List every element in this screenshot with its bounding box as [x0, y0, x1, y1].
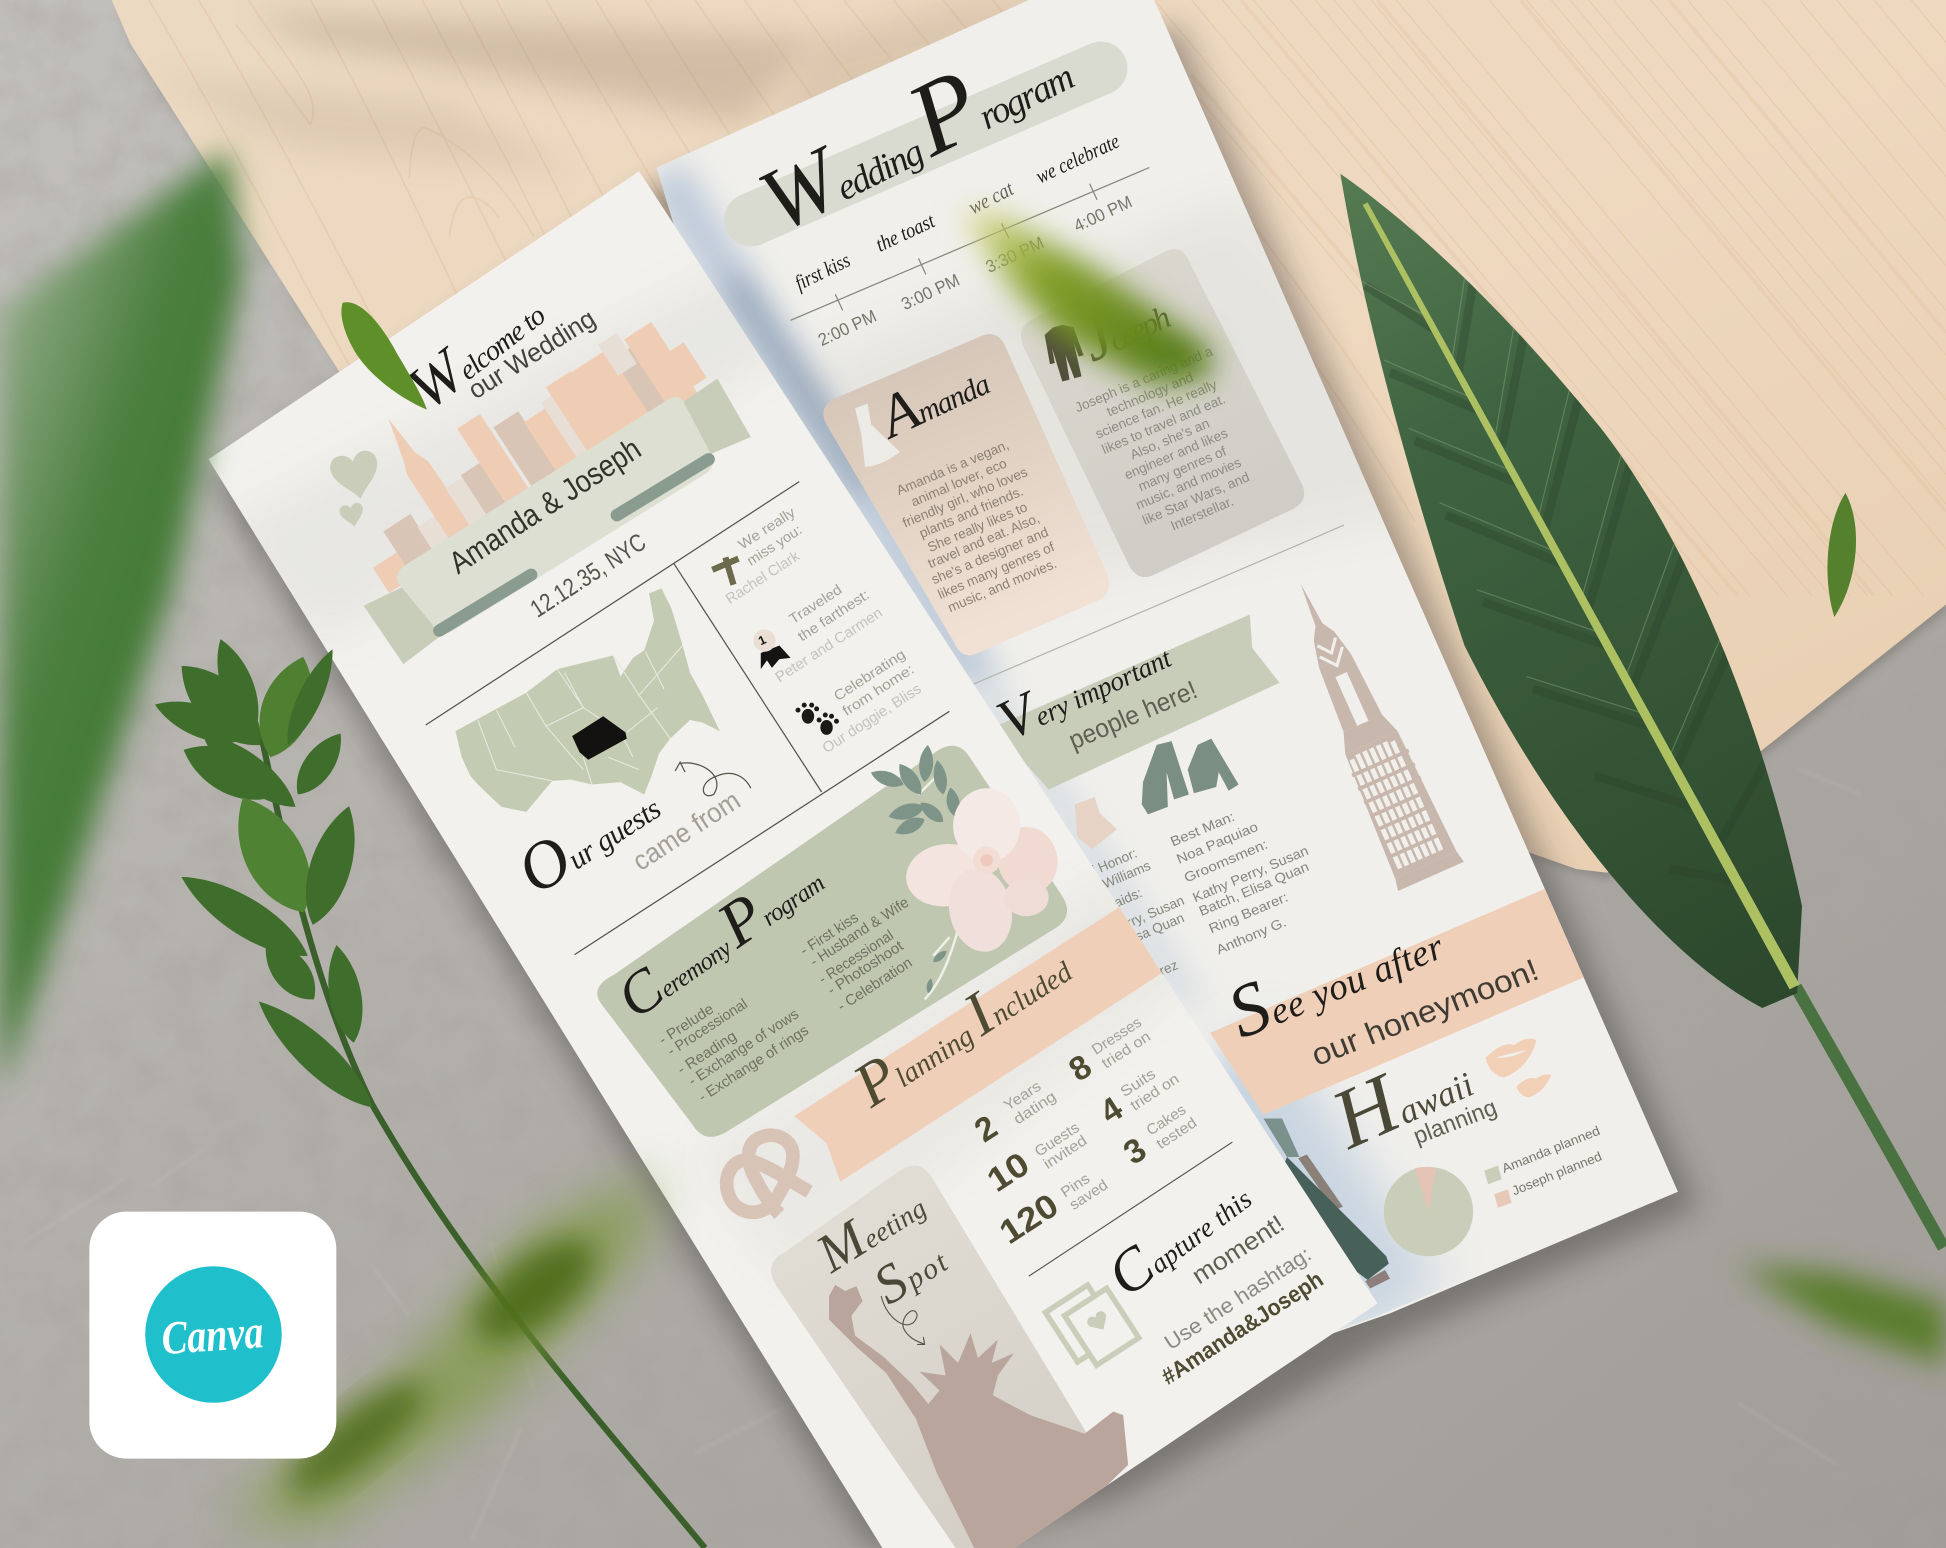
- heading: see you after our honeymoon: our honeymoon!: [1307, 952, 1543, 1073]
- timeline: [791, 129, 1149, 350]
- Amanda bio: friendly girl, who loves: [900, 464, 1030, 531]
- timeline labels: 3:00 PM: [898, 270, 963, 314]
- Joseph bio: [1073, 343, 1252, 533]
- USA map: [455, 588, 720, 812]
- text: Celebrating from home: from home:: [840, 662, 917, 720]
- panel: right paper: [657, 0, 1678, 1366]
- Joseph bio: science fan. He really: [1093, 377, 1219, 442]
- icon: first-place ribbon: [753, 629, 791, 669]
- legend: [1484, 1123, 1604, 1208]
- heading: Planning Included: Planning Included: [841, 931, 1082, 1121]
- Joseph bio: many genres of: [1136, 443, 1229, 494]
- stats: planning numbers: Cakes: [1144, 1102, 1189, 1139]
- heading: Meeting Spot: [805, 1172, 957, 1316]
- stats: planning numbers: saved: [1067, 1177, 1111, 1214]
- heading: Our guests came from: came from: [627, 784, 746, 876]
- big tropical leaf: [1340, 174, 1944, 1248]
- Amanda bio: likes many genres of: [936, 539, 1057, 602]
- Amanda name: Amanda: [865, 343, 998, 452]
- list: ceremony: - Exchange of rings: [696, 1023, 812, 1106]
- legend: Amanda planned: [1500, 1123, 1602, 1176]
- see you after banner: [1210, 888, 1585, 1115]
- fold shading: [664, 174, 1489, 1316]
- list: wedding party: Kathy Perry, Susan: [1073, 893, 1186, 952]
- Kansas highlighted: [572, 716, 627, 760]
- heading: Hawaii planning: planning: [1410, 1094, 1500, 1149]
- icon: hearts: [328, 449, 384, 529]
- panel: ceremony program: [597, 744, 1067, 1137]
- heading: Our guests came from: Our guests: [504, 764, 671, 909]
- list: wedding party: Best Man:: [1168, 809, 1237, 849]
- text: We really miss you: Rachel Clark: [723, 548, 803, 608]
- text: Traveled the farthest: the farthest:: [795, 587, 873, 645]
- Amanda bio: music, and movies.: [946, 556, 1059, 615]
- Amanda bio: animal lover, eco: [909, 455, 1009, 509]
- timeline labels: 4:00 PM: [1070, 191, 1135, 236]
- icon: Chrysler building: [1268, 569, 1464, 891]
- heading: Meeting Spot: Spot: [863, 1226, 957, 1316]
- timeline labels: [791, 129, 1135, 350]
- title: Wedding Program: Wedding Program: [738, 2, 1087, 254]
- list: wedding party: Ring Bearer:: [1207, 889, 1290, 936]
- blurred leaf bottom right: [1738, 1266, 1946, 1366]
- stats: planning numbers: Suits: [1118, 1066, 1159, 1101]
- panel: Joseph card: [1021, 249, 1304, 577]
- timeline labels: first kiss: [791, 248, 854, 295]
- heading: capture this moment: Use the hashtag:: [1161, 1243, 1316, 1355]
- list: wedding party: Groomsmen:: [1182, 837, 1270, 885]
- planning included banner: [794, 906, 1162, 1182]
- text: We really miss you: We really: [736, 504, 799, 553]
- pie chart: [1384, 1167, 1473, 1256]
- Amanda bio: Amanda is a vegan,: [894, 437, 1011, 498]
- stats: planning numbers: dating: [1011, 1089, 1059, 1128]
- text: We really miss you: [723, 504, 805, 608]
- icon: suit: [1044, 325, 1084, 382]
- icon: lips: [1486, 1039, 1551, 1097]
- heading: Meeting Spot: Meeting: [805, 1172, 935, 1284]
- heading: see you after our honeymoon: [1217, 896, 1543, 1073]
- Joseph bio: like Star Wars, and: [1140, 469, 1252, 528]
- stats: planning numbers: 4: [1094, 1090, 1130, 1131]
- heading: Hawaii planning: Hawaii: [1318, 1025, 1484, 1167]
- timeline labels: we cat: [964, 176, 1018, 219]
- stats: planning numbers: tried on: [1128, 1071, 1182, 1114]
- list: wedding party: [1051, 809, 1311, 985]
- icon: bridesmaid dress: [1075, 797, 1117, 849]
- heading: Welcome to our Wedding: Welcome to: [395, 276, 556, 423]
- heading: see you after our honeymoon: See you after: [1217, 896, 1453, 1055]
- very important banner: [993, 614, 1280, 790]
- timeline labels: 3:30 PM: [982, 232, 1047, 277]
- icon: Statue of Liberty: [829, 1285, 1128, 1548]
- stats: planning numbers: 3: [1117, 1131, 1153, 1172]
- Joseph bio: likes to travel and eat.: [1100, 391, 1228, 457]
- heading: very important people: people here!: [1064, 674, 1202, 755]
- curly arrow: [675, 762, 751, 796]
- timeline labels: we celebrate: [1032, 129, 1123, 188]
- list: wedding party: Kathy Perry, Susan: [1190, 843, 1311, 905]
- leaf on paper: [341, 302, 427, 410]
- blurred leaf over paper: [962, 211, 1210, 385]
- timeline labels: the toast: [872, 208, 939, 257]
- text: We really miss you: miss you:: [744, 522, 805, 569]
- curly arrow: [881, 1296, 925, 1344]
- heading: Hawaii planning: [1318, 1025, 1500, 1167]
- heading: capture this moment: #Amanda&Joseph: [1156, 1266, 1328, 1390]
- text: Celebrating from home: Our doggie, Bliss: [820, 681, 924, 757]
- icon: paw prints: [796, 703, 839, 735]
- stats: planning numbers: 8: [1063, 1048, 1098, 1089]
- heading: capture this moment: moment!: [1187, 1210, 1290, 1290]
- stats: planning numbers: Pins: [1058, 1171, 1093, 1201]
- Amanda bio: travel and eat. Also,: [926, 511, 1042, 571]
- list: ceremony: - Exchange of vows: [686, 1007, 802, 1090]
- Amanda bio: She really likes to: [925, 499, 1030, 555]
- stats: planning numbers: Guests: [1032, 1120, 1083, 1160]
- panel: meeting spot: [771, 1165, 1128, 1548]
- list: ceremony: - Reading: [675, 1028, 740, 1078]
- legend: Joseph planned: [1510, 1149, 1604, 1198]
- heading: capture this moment: [1095, 1161, 1328, 1390]
- heading: Ceremony Program: Ceremony Program: [602, 839, 835, 1032]
- stats: planning numbers: Dresses: [1089, 1015, 1145, 1059]
- stats: planning numbers: 2: [968, 1109, 1004, 1150]
- list: wedding party: Perez: [1142, 957, 1180, 985]
- flower: [902, 788, 1064, 958]
- blurred leaf bottom: [223, 1173, 652, 1527]
- stats: planning numbers: Years: [1001, 1079, 1044, 1114]
- list: wedding party: Maid of Honor:: [1051, 846, 1139, 894]
- timeline labels: 2:00 PM: [815, 306, 880, 350]
- list: wedding party: Batch, Elisa Quan: [1197, 859, 1311, 919]
- Joseph bio: Interstellar.: [1168, 494, 1236, 533]
- text: Traveled the farthest: Traveled: [787, 582, 845, 628]
- title banner: [751, 68, 1101, 220]
- list: ceremony: [656, 895, 915, 1106]
- NYC skyline: [309, 261, 711, 594]
- text: Celebrating from home: Celebrating: [831, 647, 909, 705]
- blurred foreground leaf left: [0, 149, 242, 1092]
- heading: Welcome to our Wedding: [395, 276, 601, 423]
- floral illustration: [868, 744, 1064, 999]
- Amanda bio: [894, 437, 1059, 615]
- text: Celebrating from home: [820, 647, 924, 757]
- twig with leaves: [149, 634, 705, 1548]
- name ribbon: [364, 379, 751, 664]
- Joseph name: Joseph: [1068, 272, 1179, 375]
- Amanda bio: she's a designer and: [929, 524, 1051, 587]
- stats: planning numbers: 120: [993, 1187, 1065, 1252]
- Joseph bio: Also, she's an: [1128, 416, 1212, 462]
- list: ceremony: - Photoshoot: [825, 938, 907, 999]
- small leaf right: [1827, 493, 1856, 617]
- Joseph bio: engineer and likes: [1122, 425, 1230, 482]
- stats: planning numbers: tried on: [1099, 1029, 1154, 1072]
- Canva badge: [89, 1212, 336, 1459]
- icon: cross: [712, 557, 738, 585]
- stats: planning numbers: invited: [1041, 1133, 1090, 1173]
- heading: very important people: Very important: [988, 619, 1180, 753]
- list: ceremony: - Prelude: [656, 1001, 717, 1049]
- paper shadows: [213, 25, 1698, 1548]
- list: wedding party: Batch, Elisa Quan: [1080, 910, 1186, 967]
- heading: Our guests came from: [504, 764, 746, 909]
- panel: Amanda card: [823, 334, 1109, 655]
- Canva wordmark: Canva: [160, 1306, 265, 1365]
- icon: dress: [855, 403, 900, 467]
- icon: jackets: [1142, 739, 1239, 814]
- list: ceremony: - Recessional: [816, 928, 897, 988]
- icon: pretzel: [727, 1135, 809, 1214]
- list: wedding party: Linda Williams: [1066, 858, 1153, 906]
- Joseph bio: technology and: [1104, 369, 1195, 419]
- stats: planning numbers: [968, 1015, 1200, 1252]
- list: ceremony: - Celebration: [835, 955, 915, 1015]
- wooden board: [112, 0, 1946, 879]
- list: ceremony: - Husband & Wife: [808, 895, 912, 970]
- couple names: Amanda & Joseph: [443, 431, 647, 581]
- list: wedding party: Noa Paquiao: [1174, 819, 1261, 867]
- date: 12.12.35, NYC: [526, 529, 651, 623]
- Amanda bio: plants and friends.: [917, 484, 1025, 541]
- Joseph bio: Joseph is a caring and a: [1073, 343, 1215, 415]
- stats: planning numbers: tested: [1154, 1115, 1200, 1153]
- heading: capture this moment: Capture this: [1095, 1161, 1262, 1309]
- icon: first-place ribbon: 1: [756, 633, 768, 648]
- list: wedding party: Bridesmaids:: [1066, 885, 1144, 930]
- text: Traveled the farthest: Peter and Carmen: [773, 605, 886, 686]
- list: ceremony: - Processional: [665, 996, 751, 1060]
- list: wedding party: Anthony G.: [1214, 914, 1288, 957]
- heading: Welcome to our Wedding: our Wedding: [463, 303, 601, 405]
- icon: suitcase: [1263, 1118, 1390, 1289]
- icon: polaroid photos: [1045, 1277, 1139, 1373]
- panel: left paper: [208, 171, 1378, 1548]
- Joseph bio: music, and movies: [1134, 455, 1243, 513]
- list: ceremony: - First kiss: [798, 910, 862, 959]
- stats: planning numbers: 10: [981, 1146, 1036, 1200]
